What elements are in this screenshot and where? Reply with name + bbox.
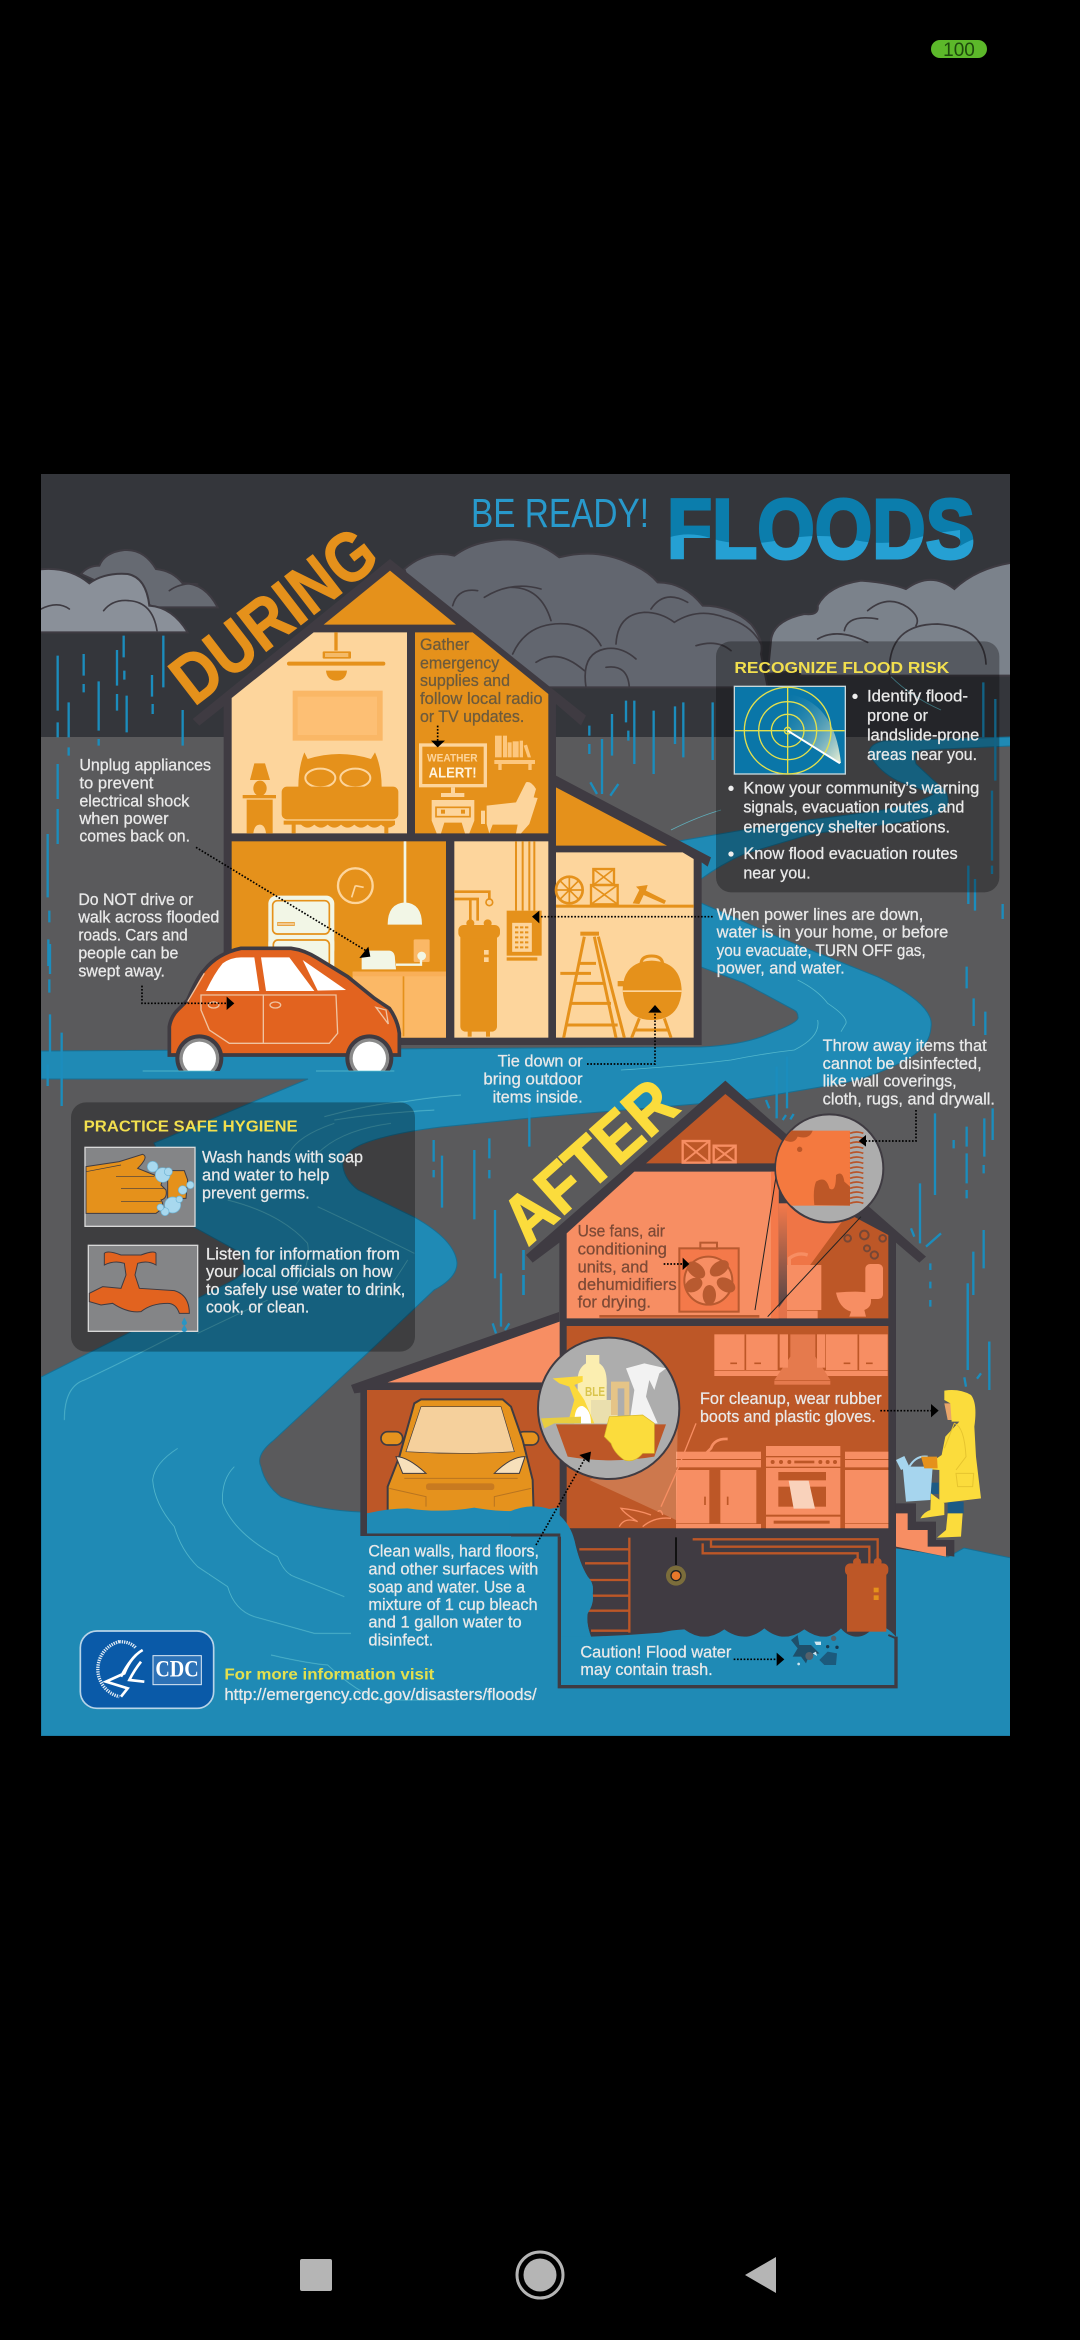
listen for information text: to safely use water to drink, (206, 1280, 405, 1299)
recognize bullets: signals, evacuation routes, and (743, 798, 964, 817)
callout: tie down (484, 1054, 583, 1103)
recognize bullets: near you. (743, 863, 811, 882)
more information: For more information visit (224, 1666, 435, 1683)
weather alert tv text: ALERT! (429, 766, 477, 782)
after upper room with fan (567, 1172, 787, 1318)
kitchen cabinets and stove (589, 1334, 888, 1528)
recognize bullets: prone or (867, 706, 928, 725)
wash hands text: Wash hands with soap (202, 1148, 363, 1167)
arrow: throw away to drywall (859, 1110, 916, 1147)
callout: caution trash (580, 1642, 732, 1679)
title: floods: FLOODS (667, 482, 975, 576)
callout: unplug appliances: comes back on. (79, 827, 190, 846)
icon: washing hands (85, 1147, 195, 1226)
callout: do not drive: swept away. (78, 962, 165, 981)
callout: power lines (716, 905, 948, 977)
status battery pill (931, 40, 987, 61)
during text: gather supplies: Gather (420, 635, 470, 654)
arrow: drive to car (142, 986, 234, 1010)
flood water wave at left of basement (509, 1506, 593, 1637)
recognize bullets (728, 686, 979, 882)
arrow: tie down to grill (587, 1005, 662, 1064)
panel: recognize flood risk (716, 641, 999, 892)
callout: power lines: power, and water. (717, 958, 845, 977)
logo: cdc (80, 1631, 214, 1708)
arrow: unplug to toaster (196, 847, 370, 958)
magnifier: ruined drywall (774, 1114, 883, 1222)
during text: gather supplies: supplies and (420, 671, 510, 690)
large central storm cloud (404, 539, 768, 687)
basement interior (511, 1528, 896, 1687)
callout: power lines: When power lines are down, (717, 905, 923, 924)
during text: gather supplies: or TV updates. (420, 707, 524, 726)
recognize bullets: Know your community’s warning (743, 778, 979, 797)
heading: after: AFTER (487, 1064, 692, 1258)
callout: do not drive: Do NOT drive or (78, 890, 194, 909)
arrow: power lines to electrical panel (532, 911, 713, 923)
callout: clean walls: and other surfaces with (368, 1559, 538, 1578)
garage roof (351, 1312, 560, 1536)
callout: clean walls: Clean walls, hard floors, (368, 1542, 539, 1561)
after bathroom (771, 1172, 888, 1318)
during right attic (556, 787, 667, 846)
callout: clean walls: mixture of 1 cup bleach (368, 1595, 538, 1614)
arrow: caution to trash (734, 1653, 784, 1666)
callout: clean walls: disinfect. (368, 1631, 433, 1650)
callout: use fans: units, and (578, 1257, 648, 1276)
rain streaks (48, 636, 1003, 1106)
callout: tie down: Tie down or (498, 1052, 583, 1071)
heading: during: DURING (156, 512, 392, 719)
callout: caution trash: may contain trash. (580, 1660, 713, 1679)
left storm cloud (38, 550, 218, 632)
car wheels (175, 1034, 394, 1071)
callout: use fans: conditioning (578, 1239, 667, 1258)
after kitchen (567, 1326, 888, 1528)
callout: use fans (578, 1222, 677, 1312)
callout: do not drive (77, 890, 219, 981)
callout: clean walls (368, 1542, 539, 1650)
garage peach gable (388, 1322, 560, 1382)
during text: gather supplies: emergency (420, 653, 500, 672)
after garage (351, 1312, 560, 1536)
callout: throw away: cloth, rugs, and drywall. (823, 1089, 995, 1108)
footer area (80, 1542, 539, 1708)
flooded car in garage (381, 1399, 539, 1513)
wash hands text: prevent germs. (202, 1183, 310, 1202)
callout: unplug appliances: electrical shock (79, 791, 190, 810)
after attic (646, 1094, 806, 1163)
upper river ripple lines (621, 677, 941, 1070)
listen for information text (206, 1244, 405, 1317)
callout: rubber boots: For cleanup, wear rubber (700, 1389, 882, 1408)
callout: unplug appliances: Unplug appliances (79, 756, 211, 775)
listen for information text: cook, or clean. (206, 1298, 309, 1317)
hygiene heading: PRACTICE SAFE HYGIENE (84, 1119, 298, 1136)
recognize heading: RECOGNIZE FLOOD RISK (734, 660, 950, 677)
callout: rubber boots: boots and plastic gloves. (700, 1407, 876, 1426)
sky and ground background (41, 474, 1010, 1558)
callout: do not drive: walk across flooded (77, 908, 219, 927)
more information: http://emergency.cdc.gov/disasters/floods/ (224, 1685, 537, 1704)
recognize bullets: areas near you. (867, 745, 977, 764)
during text: gather supplies (420, 635, 543, 726)
callout: clean walls: soap and water. Use a (368, 1577, 525, 1596)
house silhouette and roof (193, 559, 711, 1045)
arrow: gather to tv (431, 726, 445, 747)
during attic (324, 571, 456, 625)
main river and flood water (41, 903, 1011, 1736)
during garage room (556, 852, 694, 1038)
callout: power lines: you evacuate, TURN OFF gas, (717, 941, 926, 960)
during upper left bedroom (232, 632, 407, 833)
right storm cloud (768, 562, 1014, 676)
garage water (367, 1507, 560, 1533)
car in floodwater (143, 948, 399, 1082)
wash hands text (202, 1148, 363, 1202)
lens lines (755, 1177, 861, 1317)
callout: use fans: for drying. (578, 1293, 651, 1312)
more information (224, 1666, 537, 1704)
weather alert tv text (427, 754, 478, 778)
recognize bullets: Know flood evacuation routes (743, 844, 958, 863)
logo: cdc: CDC (155, 1657, 199, 1683)
recognize bullets: Identify flood- (867, 686, 968, 705)
person in raincoat with bucket (896, 1390, 981, 1538)
garage contents (556, 869, 694, 1038)
arrow: clean walls to supplies (536, 1452, 591, 1545)
callout: clean walls: and 1 gallon water to (368, 1613, 522, 1632)
after roof and walls (526, 1081, 926, 1530)
callout: caution trash: Caution! Flood water (580, 1642, 732, 1661)
upper river (660, 737, 1011, 880)
arrow: fans (664, 1258, 689, 1270)
during kitchen (232, 841, 446, 1039)
arrow: boots to person (880, 1404, 939, 1417)
during house (193, 559, 711, 1045)
panel: practice safe hygiene (71, 1102, 415, 1352)
callout: tie down: bring outdoor (483, 1070, 583, 1089)
magnifier: cleaning supplies (538, 1338, 679, 1479)
callout: do not drive: roads. Cars and (78, 926, 188, 945)
listen for information text: Listen for information from (206, 1244, 400, 1263)
during upper right living room (415, 632, 548, 833)
callout: unplug appliances: to prevent (79, 774, 154, 793)
callout: throw away: like wall coverings, (823, 1072, 957, 1091)
callout: power lines: water is in your home, or before (716, 923, 948, 942)
callout: tie down: items inside. (493, 1087, 583, 1106)
after kitchen and basement details (509, 1334, 981, 1687)
listen for information text: your local officials on how (206, 1262, 393, 1281)
nav: home (517, 2252, 563, 2298)
during utility room (454, 841, 548, 1038)
icon: water faucet (88, 1245, 198, 1332)
nav: back (745, 2257, 776, 2293)
status battery pill: 100 (943, 40, 975, 61)
title: be ready: BE READY! (471, 490, 649, 536)
callout: unplug appliances: when power (78, 809, 169, 828)
recognize bullets: emergency shelter locations. (743, 817, 950, 836)
callout: throw away: Throw away items that (823, 1036, 987, 1055)
icon: radar map (734, 686, 845, 774)
after house (526, 1036, 995, 1530)
recognize bullets: landslide-prone (867, 726, 979, 745)
magnifier: cleaning supplies: BLE (585, 1385, 605, 1399)
nav: recent apps (300, 2259, 332, 2291)
callout: use fans: Use fans, air (578, 1222, 665, 1241)
infographic panel (38, 474, 1014, 1737)
garage interior (367, 1390, 560, 1513)
weather alert tv text: WEATHER (427, 752, 478, 764)
river ripple lines (64, 1095, 461, 1700)
callout: throw away: cannot be disinfected, (823, 1054, 982, 1073)
callout: do not drive: people can be (78, 944, 178, 963)
callout: throw away (823, 1036, 995, 1108)
callout: unplug appliances (78, 756, 211, 846)
floating trash (791, 1635, 839, 1665)
callout: use fans: dehumidifiers (578, 1275, 677, 1294)
navigation bar (300, 2252, 776, 2298)
wash hands text: and water to help (202, 1166, 329, 1185)
during text: gather supplies: follow local radio (420, 689, 543, 708)
callout: rubber boots (700, 1389, 882, 1426)
porch stairs (896, 1503, 954, 1557)
